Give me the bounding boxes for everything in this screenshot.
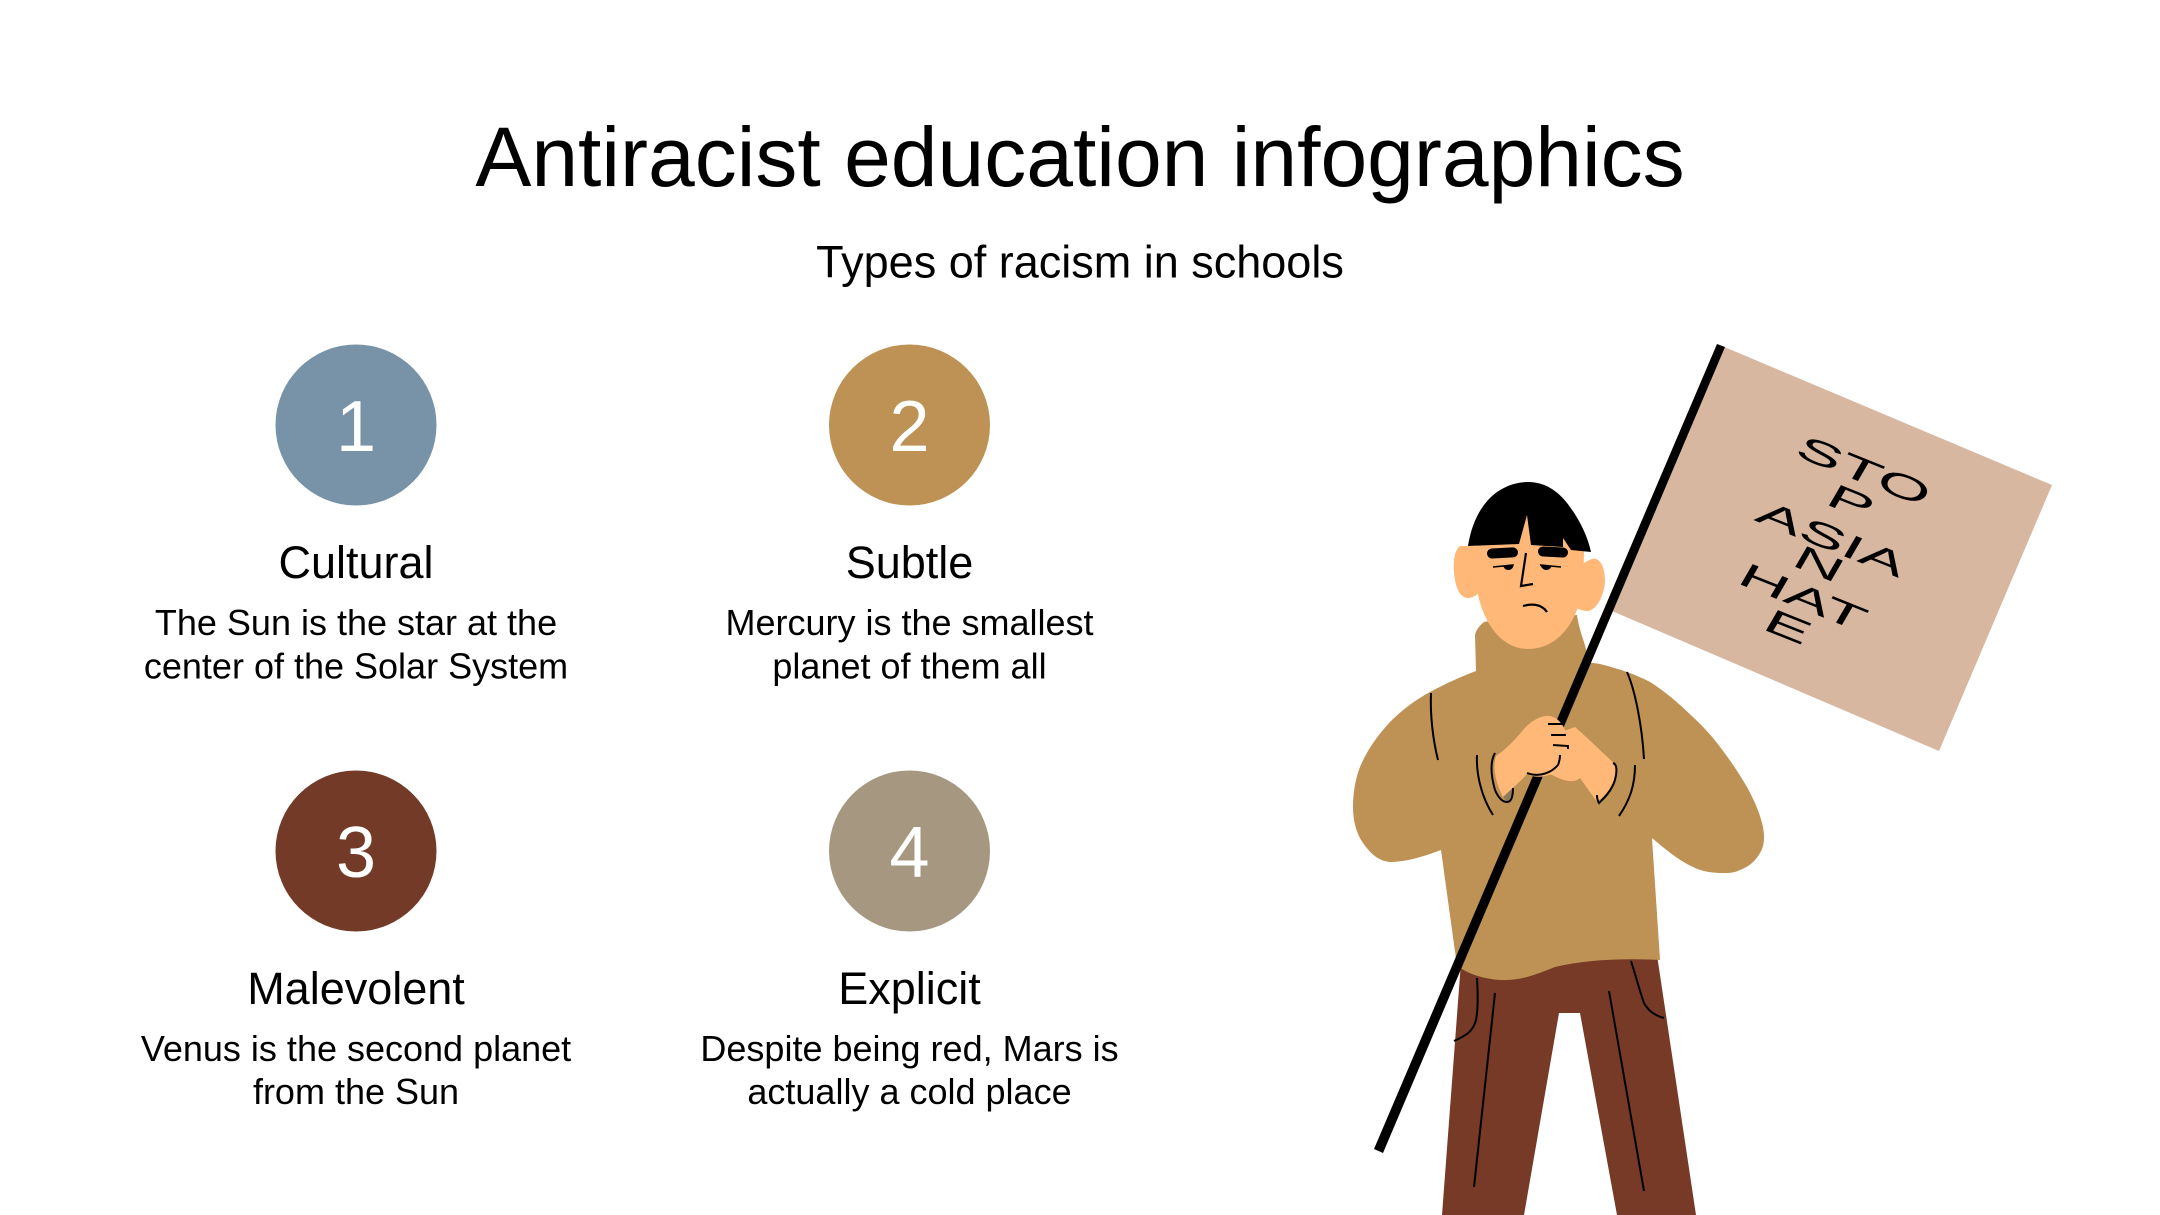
description: Malevolent: from the Sun xyxy=(253,1071,459,1112)
sweater xyxy=(1353,615,1764,980)
description: Explicit: actually a cold place xyxy=(747,1071,1072,1112)
number badge 2 xyxy=(829,344,990,506)
subtitle: Types of racism in schools xyxy=(816,236,1344,288)
face features xyxy=(1487,546,1568,612)
description: Subtle: planet of them all xyxy=(772,646,1047,686)
description: Cultural: The Sun is the star at the xyxy=(155,602,557,643)
title: Antiracist education infographics xyxy=(475,110,1685,204)
flag with slogan: E xyxy=(1757,602,1819,652)
number badge 4 xyxy=(829,770,990,932)
number badge 4: 4 xyxy=(889,813,930,893)
hands gripping pole xyxy=(1477,716,1635,816)
flag with slogan: HAT xyxy=(1732,556,1874,638)
description: Subtle: Mercury is the smallest xyxy=(725,602,1094,643)
panel: 4 Explicit xyxy=(700,770,1119,1112)
number badge 3: 3 xyxy=(336,813,376,893)
number badge 1: 1 xyxy=(336,387,376,467)
flag pole xyxy=(1374,344,1725,1153)
heading: Malevolent: Malevolent xyxy=(247,963,465,1014)
flag with slogan: N xyxy=(1786,538,1852,590)
number badge 2: 2 xyxy=(889,387,930,467)
flag with slogan xyxy=(1612,346,2052,751)
description: Malevolent: Venus is the second planet xyxy=(141,1028,571,1069)
panel: 2 Subtle xyxy=(725,344,1094,686)
panel: 1 Cultural xyxy=(144,344,568,686)
panel: 3 Malevolent xyxy=(141,770,571,1112)
head xyxy=(1454,482,1605,649)
flag with slogan: STO xyxy=(1789,428,1939,514)
flag with slogan: P xyxy=(1820,477,1882,527)
heading: Subtle: Subtle xyxy=(846,537,973,588)
heading: Cultural: Cultural xyxy=(278,537,434,588)
heading: Explicit: Explicit xyxy=(838,963,981,1014)
trousers xyxy=(1442,955,1696,1215)
flag with slogan: ASIA xyxy=(1749,493,1915,585)
number badge 1 xyxy=(276,344,436,506)
illustration: protester holding flag xyxy=(1353,344,2052,1215)
description: Cultural: center of the Solar System xyxy=(144,646,568,686)
description: Explicit: Despite being red, Mars is xyxy=(700,1028,1119,1069)
hair xyxy=(1468,482,1591,552)
number badge 3 xyxy=(276,770,436,932)
